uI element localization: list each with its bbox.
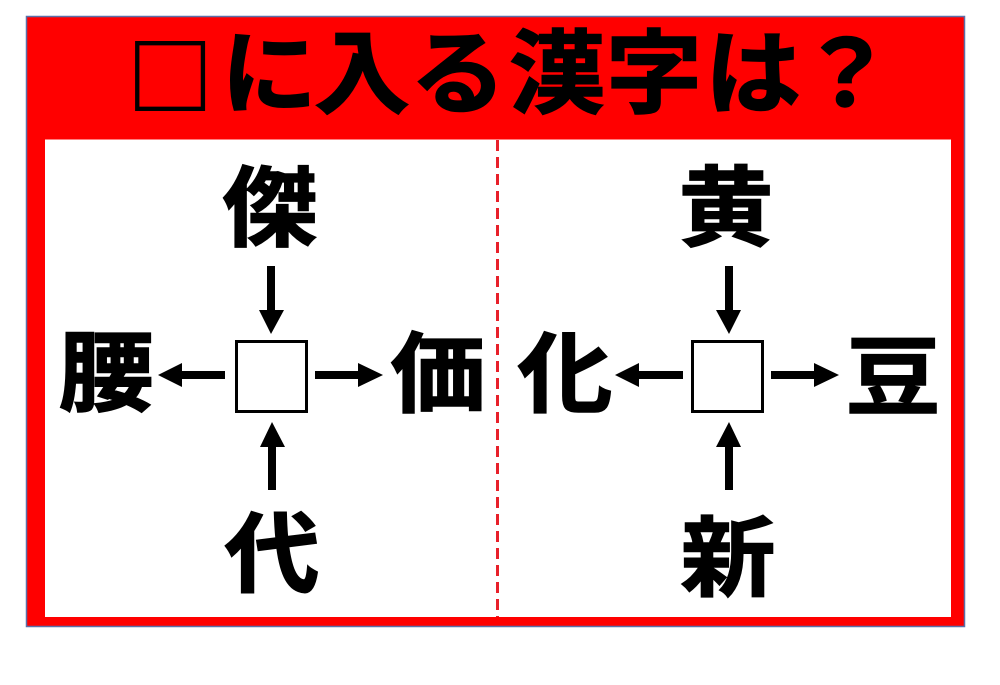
kanji: top: 傑 (222, 160, 318, 258)
center blank box (236, 342, 306, 412)
kanji: left: 腰 (58, 325, 154, 423)
center blank box (692, 342, 762, 412)
title: 漢 (509, 23, 605, 125)
title (135, 5, 894, 136)
arrow: up (716, 422, 741, 490)
arrow: down (259, 266, 284, 334)
arrow: right (315, 363, 383, 387)
arrow: left (615, 363, 683, 387)
kanji: right: 価 (390, 326, 486, 424)
kanji: top: 黄 (678, 160, 774, 258)
arrow: down (716, 266, 741, 334)
title: る (410, 23, 506, 125)
kanji: bottom: 代 (224, 506, 320, 604)
dashed divider (496, 140, 499, 617)
title: は (705, 23, 801, 125)
kanji: right: 豆 (845, 329, 941, 427)
kanji: bottom: 新 (680, 510, 776, 608)
right puzzle (517, 160, 941, 608)
arrow: right (771, 363, 839, 387)
white panel (45, 140, 951, 617)
title: 字 (606, 23, 702, 125)
title: 入 (314, 23, 410, 125)
arrow: up (260, 422, 285, 490)
arrow: left (158, 363, 225, 387)
left puzzle (58, 160, 486, 604)
title: に (221, 23, 317, 125)
title: □ (135, 5, 206, 136)
title: ？ (798, 23, 894, 125)
kanji: left: 化 (517, 326, 613, 424)
